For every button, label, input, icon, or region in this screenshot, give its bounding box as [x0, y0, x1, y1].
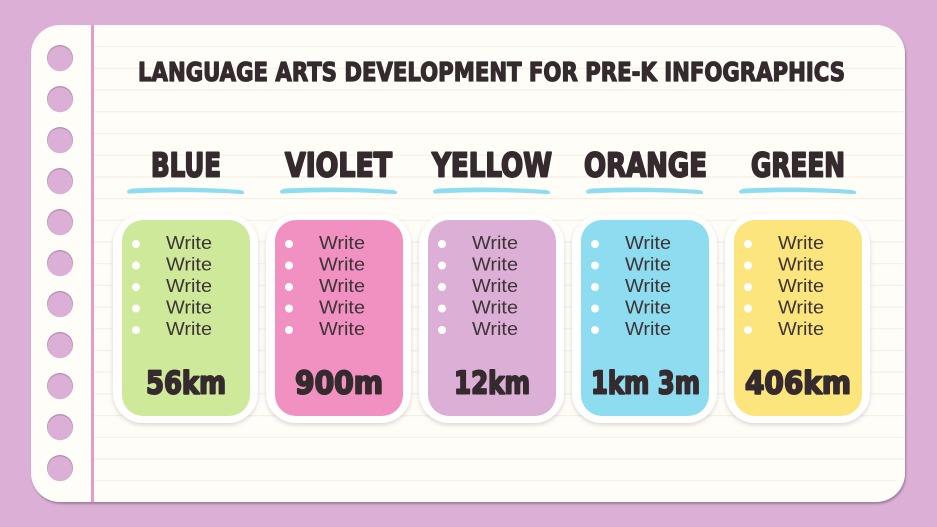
- panel: blue: [113, 214, 258, 423]
- bullet list: Write: [166, 276, 212, 296]
- bullet list: Write: [319, 254, 365, 274]
- column: violet: [266, 146, 411, 423]
- bullet list: [285, 233, 365, 339]
- bullet list: Write: [625, 319, 671, 339]
- bullet list: Write: [166, 298, 212, 318]
- bullet list: Write: [778, 233, 824, 253]
- panel: violet: [266, 214, 411, 423]
- bullet list: [591, 233, 671, 339]
- bullet list: Write: [319, 319, 365, 339]
- bullet list: Write: [625, 298, 671, 318]
- heading: violet: VIOLET: [285, 146, 392, 184]
- bullet list: [744, 233, 824, 339]
- margin line: [91, 25, 94, 502]
- column: orange: [572, 146, 717, 423]
- value: 56km: [146, 366, 226, 402]
- panel: green: [725, 214, 870, 423]
- heading: yellow: YELLOW: [431, 146, 552, 184]
- binder holes: [47, 45, 73, 481]
- panel: orange: [572, 214, 717, 423]
- column: yellow: [419, 146, 564, 423]
- bullet list: Write: [319, 233, 365, 253]
- bullet list: Write: [319, 276, 365, 296]
- panel: yellow: [419, 214, 564, 423]
- column: green: [725, 146, 870, 423]
- bullet list: Write: [472, 233, 518, 253]
- bullet list: Write: [625, 254, 671, 274]
- bullet list: Write: [625, 276, 671, 296]
- bullet list: Write: [472, 319, 518, 339]
- value: 900m: [295, 366, 383, 402]
- value: 1km 3m: [591, 366, 700, 402]
- heading: blue: BLUE: [151, 146, 221, 184]
- bullet list: Write: [166, 319, 212, 339]
- bullet list: Write: [778, 298, 824, 318]
- underline: yellow: [433, 188, 550, 194]
- bullet list: Write: [625, 233, 671, 253]
- heading: orange: ORANGE: [584, 146, 707, 184]
- column: blue: [113, 146, 258, 423]
- underline: orange: [586, 188, 703, 194]
- underline: green: [739, 188, 856, 194]
- value: 12km: [454, 366, 530, 402]
- bullet list: Write: [778, 254, 824, 274]
- bullet list: Write: [778, 276, 824, 296]
- bullet list: Write: [472, 276, 518, 296]
- bullet list: Write: [472, 254, 518, 274]
- bullet list: Write: [166, 233, 212, 253]
- ruled paper lines: [93, 47, 905, 481]
- bullet list: Write: [166, 254, 212, 274]
- heading: green: GREEN: [751, 146, 845, 184]
- underline: blue: [127, 188, 244, 194]
- underline: violet: [280, 188, 397, 194]
- bullet list: [132, 233, 212, 339]
- bullet list: Write: [319, 298, 365, 318]
- bullet list: Write: [472, 298, 518, 318]
- bullet list: [438, 233, 518, 339]
- bullet list: Write: [778, 319, 824, 339]
- value: 406km: [745, 366, 851, 402]
